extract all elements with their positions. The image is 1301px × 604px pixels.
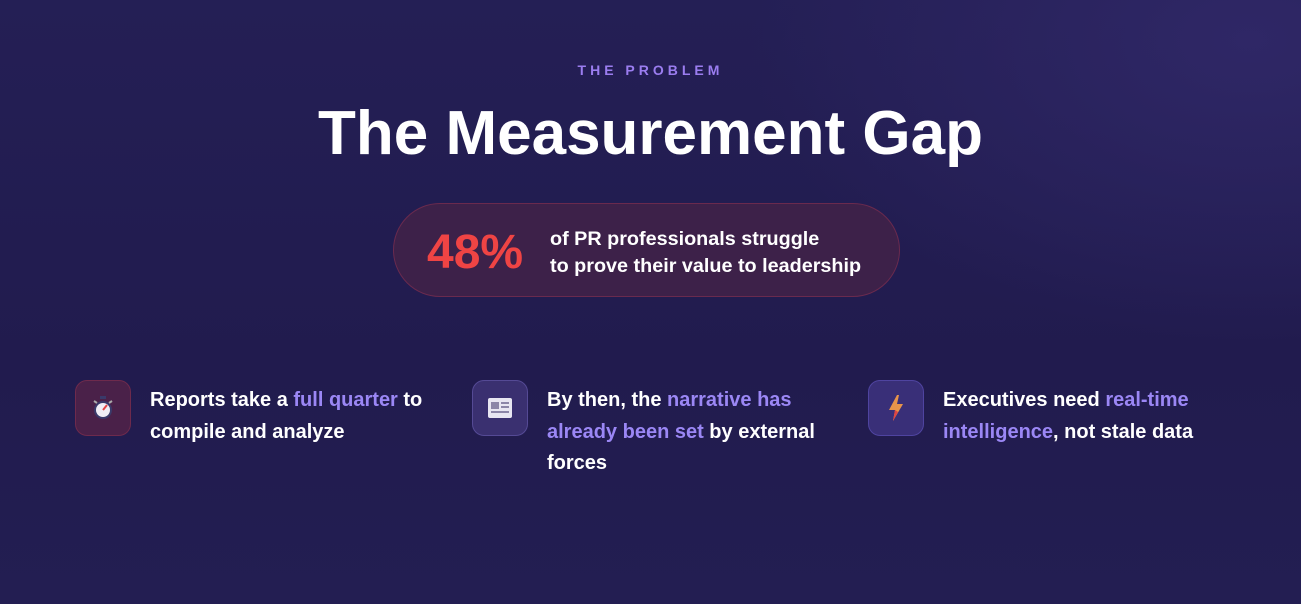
- icon: newspaper: [472, 380, 528, 436]
- stat text: [550, 228, 861, 277]
- stat number: 48%: [427, 226, 523, 279]
- title: The Measurement Gap: [318, 99, 983, 168]
- item 1: [75, 380, 422, 442]
- item 3: [868, 380, 1194, 442]
- text 2: By then, the narrative has already been set by external forces: [547, 389, 815, 474]
- icon: stopwatch: [75, 380, 131, 436]
- stat pill: [393, 203, 900, 297]
- text 1: Reports take a full quarter to compile and analyze: [150, 389, 422, 442]
- eyebrow: the problem: THE PROBLEM: [578, 62, 723, 78]
- item 2: [472, 380, 815, 474]
- stat text: of PR professionals struggle: [550, 228, 819, 250]
- stat text: to prove their value to leadership: [550, 255, 861, 277]
- text 3: Executives need real-time intelligence, not stale data: [943, 389, 1193, 442]
- icon: lightning: [868, 380, 924, 436]
